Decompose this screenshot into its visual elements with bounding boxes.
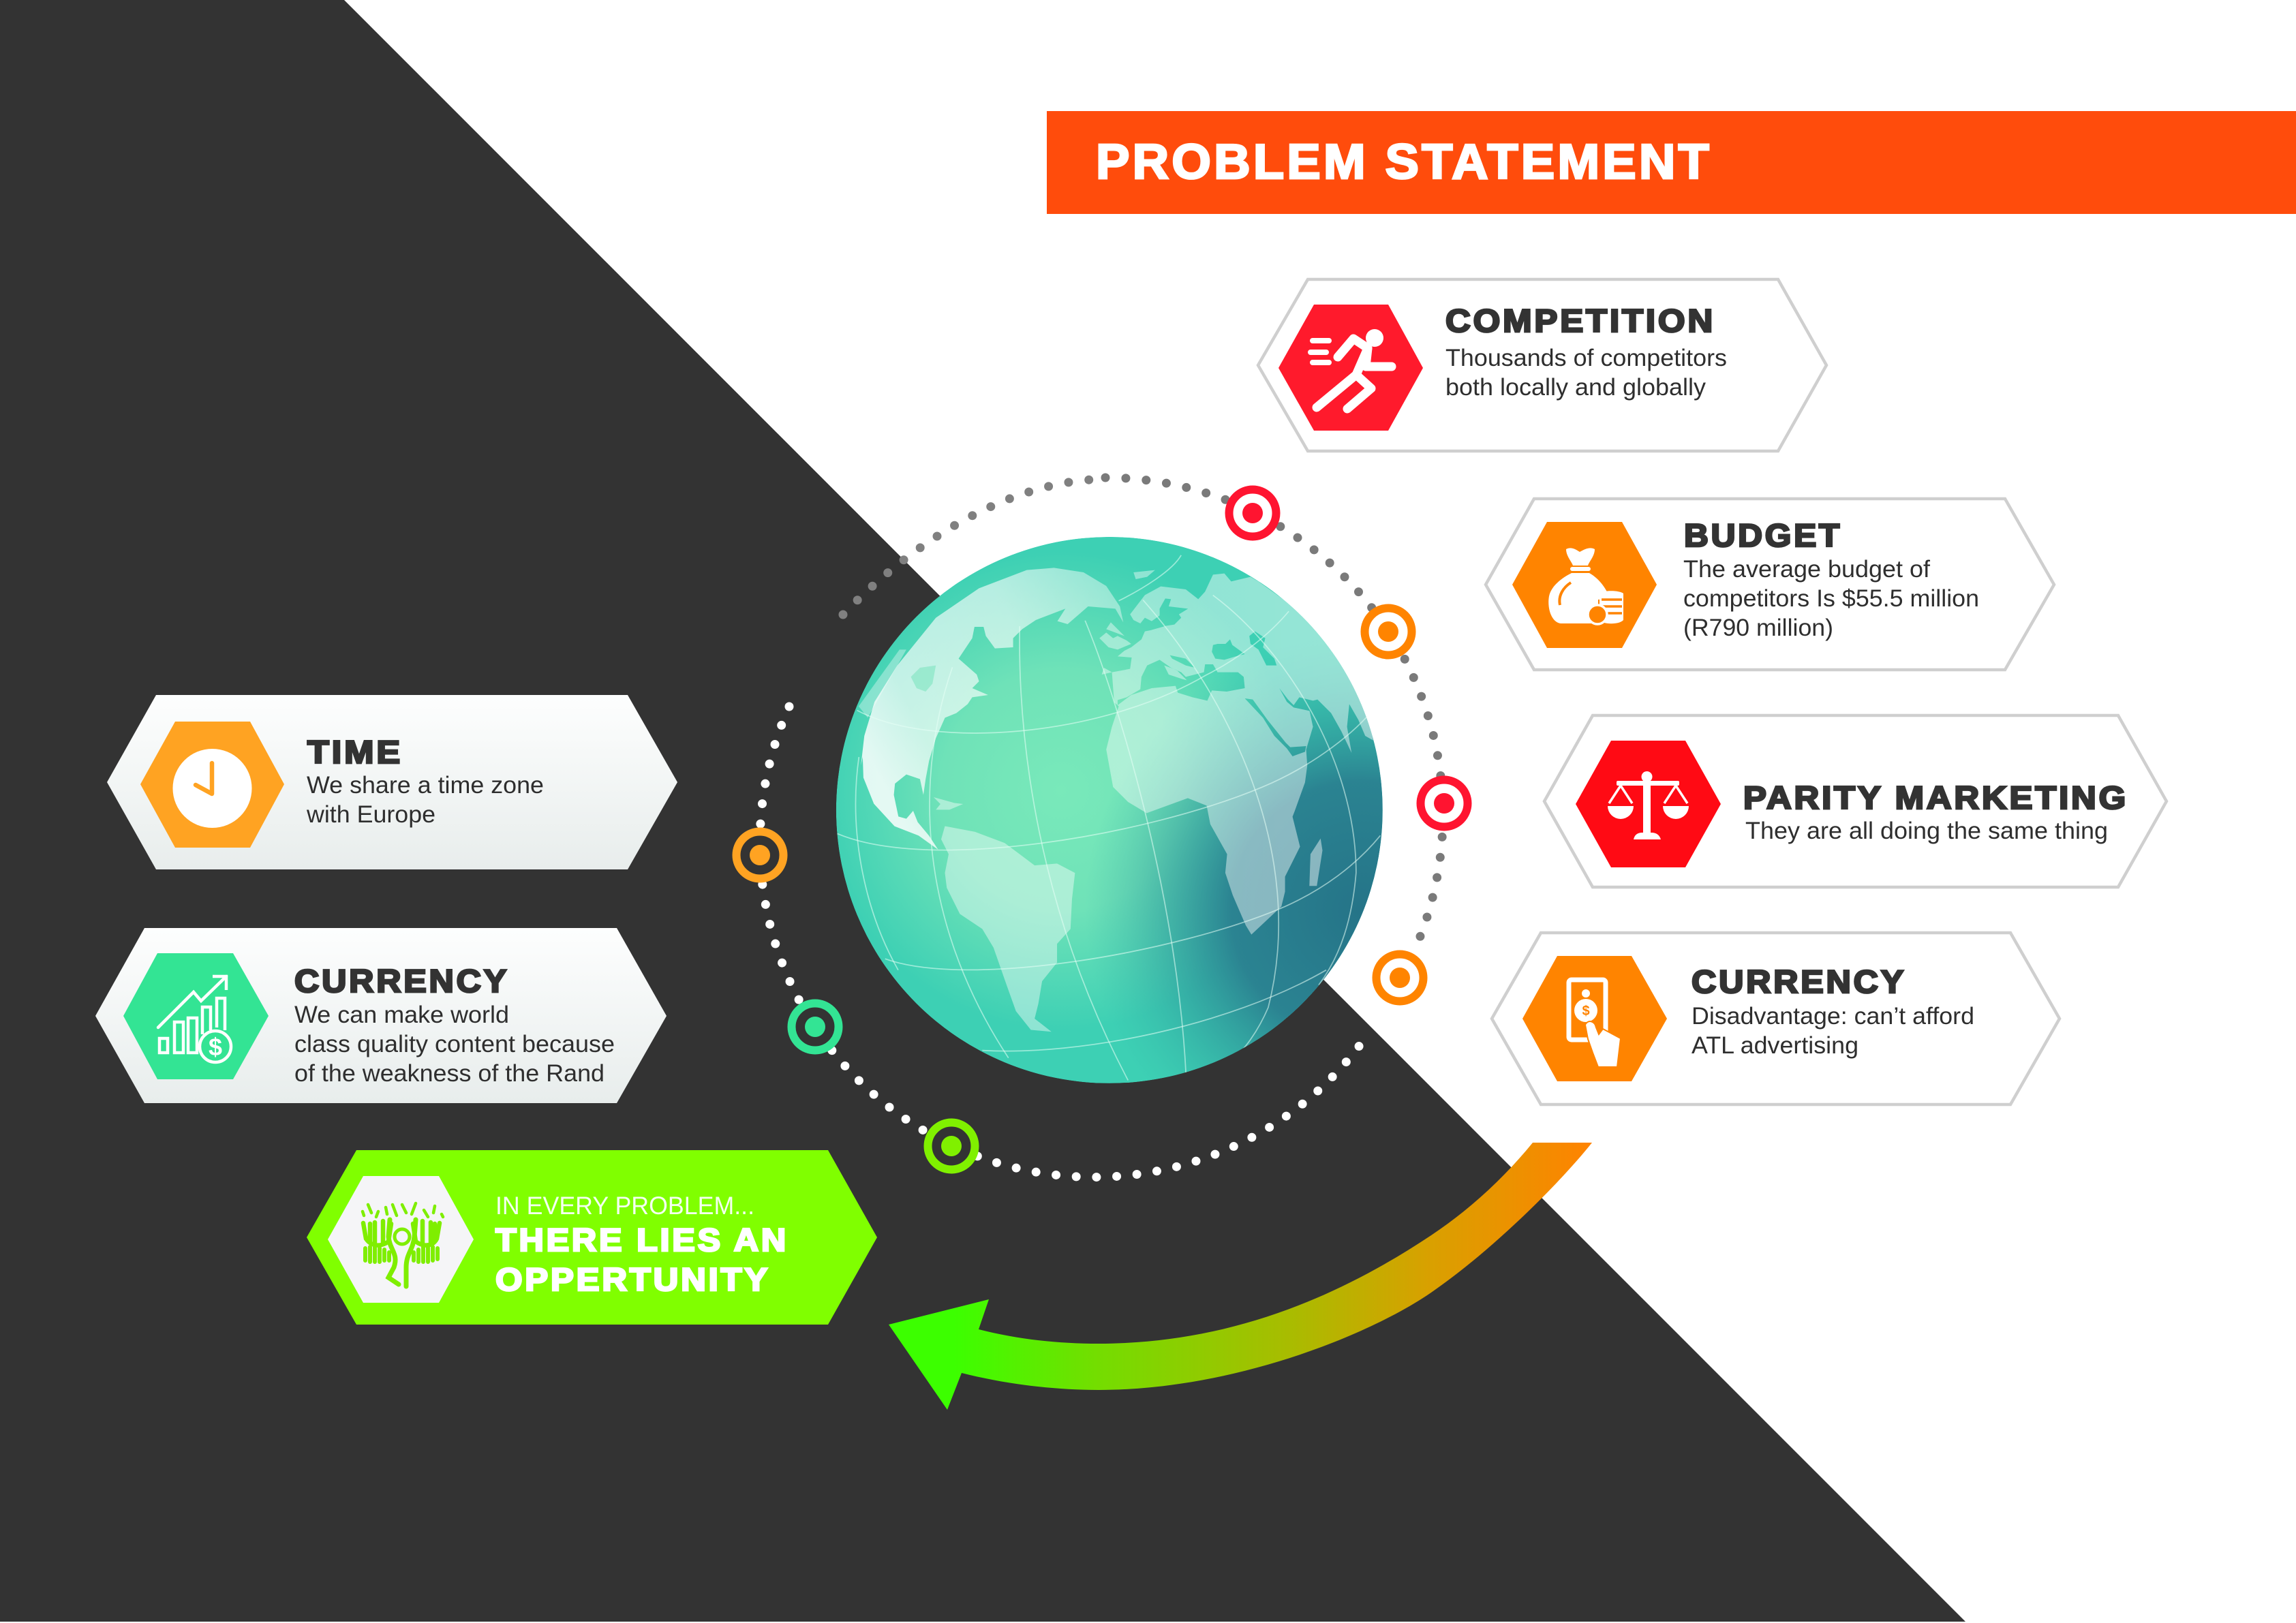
panel: opportunity (307, 1150, 877, 1325)
text: competition description: Thousands of competitors (1445, 345, 1727, 371)
dotted orbit: white lower arc (760, 707, 1360, 1177)
heading: time: TIME (307, 734, 403, 770)
dotted orbit: grey right arc (1105, 478, 1443, 951)
target markers on orbit (736, 489, 1468, 1169)
marker: orange upper (1364, 608, 1412, 655)
panel: time (107, 695, 677, 869)
text: currency disadvantage: ATL advertising (1692, 1032, 1858, 1059)
header: problem statement: PROBLEM STATEMENT (1096, 135, 1712, 189)
eurasia and africa with inland seas (1106, 574, 1373, 935)
icon: money bag (1548, 548, 1623, 624)
marker: red right (1420, 779, 1468, 827)
limb sliver (859, 649, 906, 717)
panel: parity marketing (1544, 715, 2167, 887)
text: currency disadvantage: Disadvantage: can’t afford (1692, 1003, 1974, 1030)
globe (836, 537, 1383, 1083)
madagascar (1309, 839, 1322, 886)
panel: budget (1486, 499, 2054, 670)
north america and gloss (861, 568, 1123, 850)
heading: budget: BUDGET (1684, 517, 1842, 553)
marker: green left (792, 1003, 838, 1051)
marker: lime bottom (928, 1123, 975, 1169)
heading: parity marketing: PARITY MARKETING (1743, 779, 2128, 816)
arrow: curved gradient arrow (889, 1143, 1592, 1410)
dotted orbit: grey upper-left arc (843, 479, 1105, 615)
heading: currency right: CURRENCY (1692, 963, 1906, 1000)
cuba and caribbean (934, 797, 963, 809)
text: time description: with Europe (306, 801, 435, 828)
marker: amber left (736, 831, 784, 879)
text: parity marketing description: They are all doing the same thing (1745, 818, 2108, 844)
icon: balance scale (1608, 771, 1689, 839)
panel: competition (1258, 279, 1826, 451)
icon: hand holding money (1569, 980, 1621, 1067)
text: currency advantage: We can make world (294, 1002, 509, 1028)
text: currency advantage: of the weakness of the Rand (294, 1060, 604, 1087)
text: in every problem: IN EVERY PROBLEM... (495, 1192, 754, 1220)
south america (941, 826, 1075, 1032)
text: time description: We share a time zone (307, 772, 544, 799)
heading: currency left: CURRENCY (294, 963, 509, 999)
british isles and iceland (1099, 570, 1155, 675)
text: budget description: (R790 million) (1683, 615, 1833, 641)
continents traced in detail coordinates (859, 568, 1373, 935)
icon: clock (173, 749, 252, 828)
text: budget description: competitors Is $55.5 million (1683, 585, 1979, 612)
panel: currency (advantage) (95, 928, 667, 1103)
icon: growth chart with coin: $ (209, 1033, 222, 1061)
marker: red top (1229, 489, 1276, 537)
text: budget description: The average budget of (1683, 556, 1930, 583)
text: competition description: both locally and globally (1445, 374, 1706, 401)
heading: there lies an opportunity: OPPERTUNITY (495, 1261, 770, 1297)
globe grid lines (838, 555, 1380, 1080)
marker: orange lower (1377, 954, 1423, 1002)
heading: there lies an opportunity: THERE LIES AN (495, 1222, 789, 1258)
heading: competition: COMPETITION (1445, 303, 1715, 339)
icon: cheering crowd (363, 1203, 443, 1286)
text: currency advantage: class quality content because (294, 1031, 615, 1057)
icon: runner (1311, 329, 1392, 409)
panel: currency (disadvantage) (1492, 933, 2060, 1104)
header: problem statement (1047, 111, 2296, 214)
icon: hand holding money: $ (1582, 1004, 1590, 1019)
icon: growth chart with coin (158, 976, 231, 1062)
hudson bay (911, 666, 936, 692)
